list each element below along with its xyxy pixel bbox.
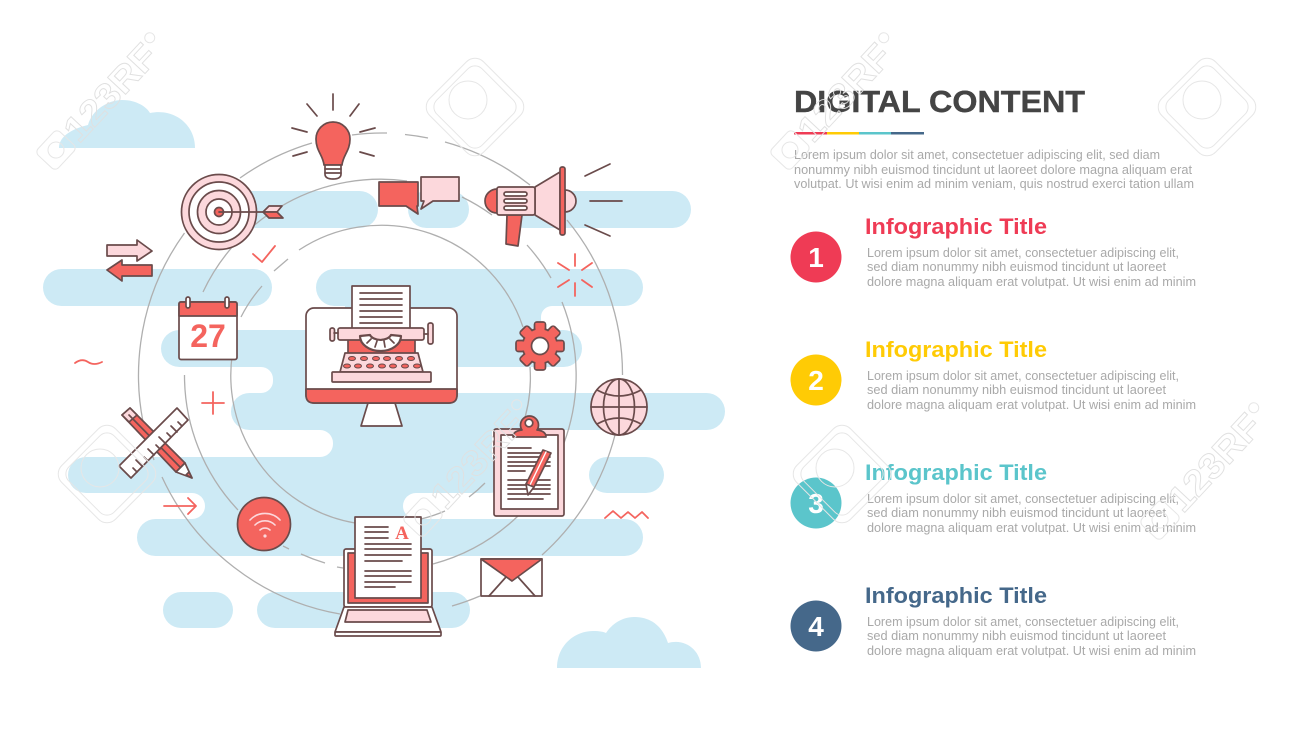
item 4 text: Lorem ipsum dolor sit amet, consectetuer adipiscing elit, — [867, 615, 1179, 629]
title colour rule — [794, 132, 924, 134]
icon: envelope — [481, 559, 542, 596]
item 4 text: dolore magna aliquam erat volutpat. Ut wisi enim ad minim — [867, 644, 1196, 658]
icon: globe — [591, 379, 647, 435]
number badge 2 — [790, 354, 842, 406]
background: blue rounded bars and clouds — [43, 100, 725, 668]
item 2 text: dolore magna aliquam erat volutpat. Ut wisi enim ad minim — [867, 398, 1196, 412]
icon: swap arrows — [107, 240, 152, 281]
list item 2 — [790, 337, 1196, 412]
item 1 text: sed diam nonummy nibh euismod tincidunt ut laoreet — [867, 260, 1167, 274]
item 1 text: dolore magna aliquam erat volutpat. Ut wisi enim ad minim — [867, 275, 1196, 289]
intro paragraph: volutpat. Ut wisi enim ad minim veniam, quis nostrud exerci tation ullam — [794, 177, 1194, 191]
item 2 text: sed diam nonummy nibh euismod tincidunt ut laoreet — [867, 383, 1167, 397]
icon: wifi badge — [238, 498, 290, 550]
decorative accent: arrow — [164, 498, 196, 514]
watermark overlays: 123RF — [422, 402, 532, 517]
list item 3 — [790, 460, 1196, 535]
watermark overlays: 123RF — [55, 35, 165, 150]
icon: laptop with document — [335, 517, 441, 636]
number badge 1 — [790, 232, 842, 282]
number badge 3: 3 — [808, 488, 824, 519]
decorative accent: plus — [202, 392, 224, 414]
item 3 title: Infographic Title — [865, 460, 1047, 485]
number badge 1: 1 — [808, 242, 824, 273]
decorative accent: zigzag — [605, 511, 648, 518]
intro paragraph — [794, 148, 1194, 191]
item 2 title: Infographic Title — [865, 337, 1047, 362]
icon: calendar with date — [179, 297, 237, 360]
list item 4 — [790, 583, 1196, 658]
icon: pencil and ruler — [119, 408, 192, 478]
icon: gear — [516, 322, 564, 370]
number badge 2: 2 — [808, 365, 824, 396]
watermark overlays: 123RF — [1159, 405, 1269, 520]
concentric dashed orbit rings — [139, 133, 623, 614]
icon: target with arrow — [182, 174, 283, 250]
item 1 text: Lorem ipsum dolor sit amet, consectetuer adipiscing elit, — [867, 246, 1179, 260]
item 4 text: sed diam nonummy nibh euismod tincidunt ut laoreet — [867, 629, 1167, 643]
item 2 text — [867, 369, 1196, 412]
heading block — [794, 84, 1194, 191]
watermark overlays: 123RF — [789, 35, 899, 150]
title: DIGITAL CONTENT — [794, 84, 1085, 119]
watermark overlays — [30, 26, 1278, 546]
document letter: A — [395, 523, 409, 544]
item 3 text: sed diam nonummy nibh euismod tincidunt ut laoreet — [867, 506, 1167, 520]
icon: typewriter on monitor — [306, 286, 457, 426]
calendar date: 27 — [190, 318, 226, 354]
item 1 text — [867, 246, 1196, 289]
list item 1 — [790, 214, 1196, 289]
item 3 text — [867, 492, 1196, 535]
number badge 4 — [790, 600, 842, 652]
decorative accent: check mark — [253, 246, 275, 262]
intro paragraph: nonummy nibh euismod tincidunt ut laoreet dolore magna aliquam erat — [794, 163, 1193, 177]
icon: megaphone — [485, 164, 622, 246]
item 4 text — [867, 615, 1196, 658]
number badge 4: 4 — [808, 611, 824, 642]
number badge 3 — [790, 478, 842, 528]
icon: light bulb — [292, 94, 375, 179]
item 3 text: Lorem ipsum dolor sit amet, consectetuer adipiscing elit, — [867, 492, 1179, 506]
item 3 text: dolore magna aliquam erat volutpat. Ut wisi enim ad minim — [867, 521, 1196, 535]
decorative accent: tilde — [75, 360, 102, 364]
item 4 title: Infographic Title — [865, 583, 1047, 608]
decorative accent: burst — [558, 254, 592, 296]
intro paragraph: Lorem ipsum dolor sit amet, consectetuer adipiscing elit, sed diam — [794, 148, 1160, 162]
icon: speech bubbles — [379, 177, 459, 214]
item 1 title: Infographic Title — [865, 214, 1047, 239]
item 2 text: Lorem ipsum dolor sit amet, consectetuer adipiscing elit, — [867, 369, 1179, 383]
icon: clipboard with pencil — [494, 416, 564, 516]
